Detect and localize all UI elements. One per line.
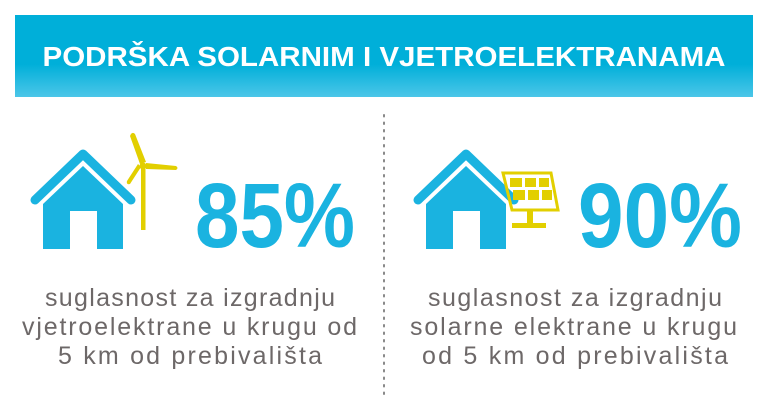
panel: wind xyxy=(22,133,357,370)
stat: 85%: 85% xyxy=(195,165,355,267)
caption: 5 km od prebivališta xyxy=(58,342,322,370)
caption: suglasnost za izgradnju xyxy=(428,284,722,312)
title: PODRŠKA SOLARNIM I VJETROELEKTRANAMA xyxy=(42,40,726,72)
caption: suglasnost za izgradnju xyxy=(45,284,335,312)
icon: wind turbine xyxy=(127,133,178,230)
icon: house xyxy=(35,154,131,249)
caption xyxy=(22,284,357,370)
caption: vjetroelektrane u krugu od xyxy=(22,313,357,341)
icon: house xyxy=(418,154,514,249)
icon: solar panel xyxy=(503,173,558,228)
caption: solarne elektrane u krugu xyxy=(410,313,737,341)
divider xyxy=(383,115,385,398)
caption: od 5 km od prebivališta xyxy=(422,342,728,370)
panel: solar xyxy=(410,154,742,370)
caption xyxy=(410,284,737,370)
title banner xyxy=(15,15,753,97)
stat: 90%: 90% xyxy=(578,165,742,267)
